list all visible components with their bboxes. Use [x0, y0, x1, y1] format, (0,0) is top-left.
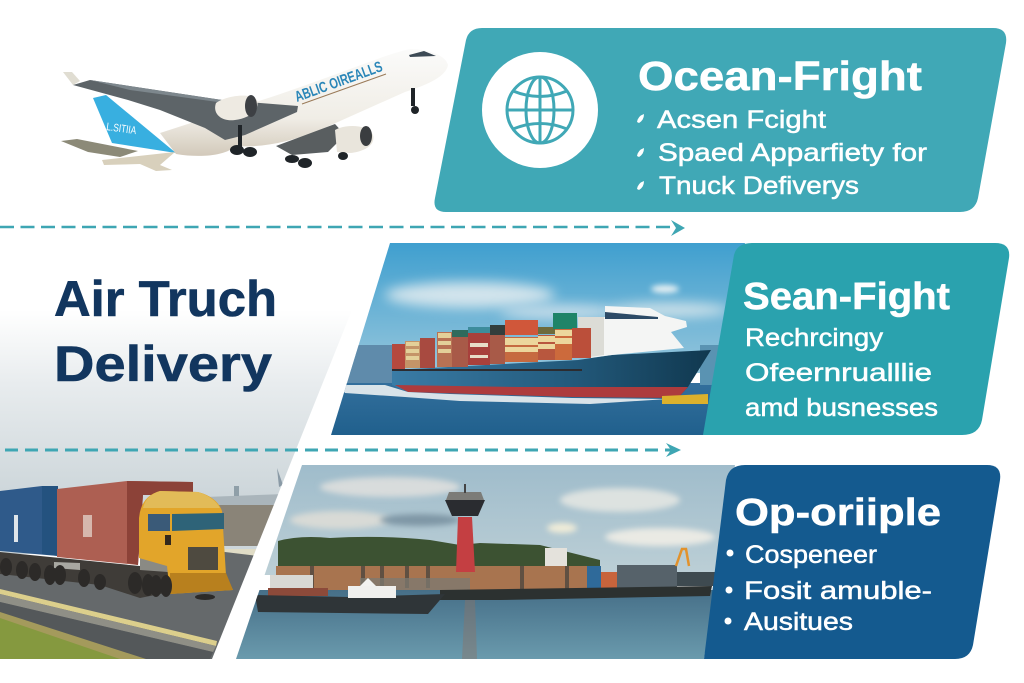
bullet list	[637, 106, 927, 200]
dashed arrow: lower	[5, 443, 681, 457]
bullet list: Cospeneer	[745, 541, 877, 569]
containers	[392, 313, 591, 371]
fuselage	[160, 49, 448, 156]
lower stabiliser	[102, 152, 175, 171]
container ship hull	[392, 350, 711, 398]
heading: Op-oriiple	[735, 492, 941, 534]
container quay	[276, 566, 590, 590]
photo: truck	[0, 481, 233, 600]
dashed arrow: upper	[0, 220, 685, 236]
panel: operations card	[704, 465, 1000, 659]
white bridge building	[545, 548, 567, 566]
panel: truck photo background	[0, 336, 341, 659]
blue container	[0, 486, 58, 556]
small vessel	[255, 575, 445, 614]
icon: globe	[482, 52, 598, 168]
photo: airplane	[61, 49, 448, 171]
bullet list: Ausitues	[744, 608, 853, 636]
airline name: ABLIC OIREALLS	[293, 58, 385, 106]
body text: amd busnesses	[745, 394, 938, 422]
wake and barge	[340, 385, 668, 404]
panel: port photo	[230, 465, 740, 665]
panel: sea freight card	[703, 243, 1009, 435]
far wing and engine	[276, 124, 345, 155]
bullet list: Tnuck Defiverys	[659, 172, 859, 200]
bullet list: Spaed Apparfiety for	[658, 139, 927, 167]
landing gear	[230, 88, 419, 168]
red container	[57, 481, 193, 565]
tail text: L.SITIIA	[106, 121, 137, 137]
stabiliser	[61, 139, 138, 157]
heading: Ocean-Fright	[638, 53, 922, 99]
bullet list: Fosit amuble-	[744, 577, 932, 605]
yellow cab	[139, 491, 233, 594]
title	[54, 271, 277, 392]
body text	[745, 324, 938, 422]
near wing	[63, 72, 80, 85]
superstructure	[591, 306, 687, 358]
truck chassis	[0, 552, 170, 598]
panel: ocean freight photo	[330, 243, 750, 438]
truck wheels	[0, 558, 215, 600]
title: Delivery	[54, 336, 272, 392]
bullet list	[724, 541, 932, 636]
port tower	[445, 484, 485, 572]
bullet list: Acsen Fcight	[657, 106, 826, 134]
panel: ocean freight card	[434, 28, 1006, 212]
heading: Sean-Fight	[743, 276, 950, 318]
body text: Ofeernrualllie	[745, 359, 932, 387]
body text: Rechrcingy	[745, 324, 884, 352]
tail fin	[93, 95, 176, 153]
title: Air Truch	[54, 271, 277, 327]
near engine	[215, 96, 258, 120]
